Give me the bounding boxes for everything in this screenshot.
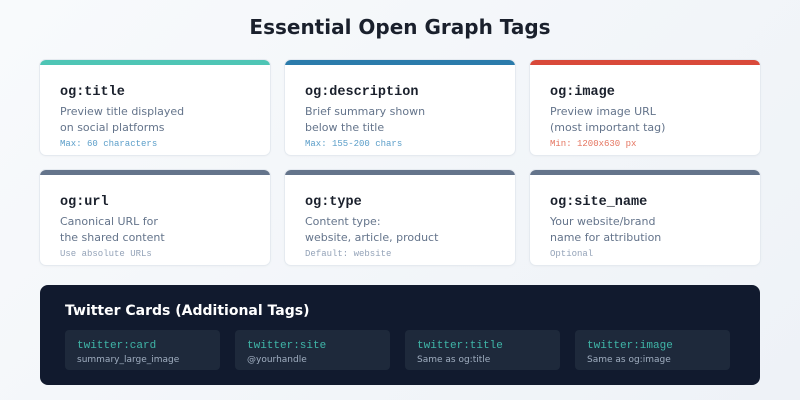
card: og:title: on social platforms — [60, 121, 165, 134]
chip: twitter:card — [65, 330, 220, 370]
panel: twitter cards — [40, 285, 760, 385]
card: og:type: Default: website — [305, 249, 391, 259]
chip: twitter:site — [235, 330, 390, 370]
card: og:site_name — [530, 170, 760, 265]
card: og:url: Use absolute URLs — [60, 249, 152, 259]
card: og:site_name: og:site_name — [550, 195, 647, 210]
card: og:description: og:description — [305, 85, 418, 100]
card: og:description: below the title — [305, 121, 384, 134]
card: og:image: (most important tag) — [550, 121, 665, 134]
chip: twitter:card: summary_large_image — [77, 355, 179, 365]
card: og:image: og:image — [550, 85, 615, 100]
card: og:description: Max: 155-200 chars — [305, 139, 402, 149]
card: og:image: Min: 1200x630 px — [550, 139, 636, 149]
card: og:site_name: Your website/brand — [550, 215, 656, 228]
card: og:title — [40, 60, 270, 155]
card: og:url: the shared content — [60, 231, 165, 244]
chip: twitter:title — [405, 330, 560, 370]
title: Essential Open Graph Tags — [249, 15, 551, 39]
card: og:type — [285, 170, 515, 265]
card: og:site_name: Optional — [550, 249, 593, 259]
chip: twitter:title: twitter:title — [417, 340, 503, 352]
card: og:url: Canonical URL for — [60, 215, 158, 228]
card: og:title: Preview title displayed — [60, 105, 184, 118]
chip: twitter:image: twitter:image — [587, 340, 673, 352]
card: og:title: Max: 60 characters — [60, 139, 157, 149]
card: og:type: Content type: — [305, 215, 381, 228]
card: og:url — [40, 170, 270, 265]
card: og:image — [530, 60, 760, 155]
chip: twitter:image — [575, 330, 730, 370]
chip: twitter:site: twitter:site — [247, 340, 326, 352]
card: og:type: og:type — [305, 195, 362, 210]
card: og:title: og:title — [60, 85, 125, 100]
card: og:type: website, article, product — [305, 231, 438, 244]
card: og:site_name: name for attribution — [550, 231, 661, 244]
card: og:image: Preview image URL — [550, 105, 656, 118]
chip: twitter:site: @yourhandle — [247, 355, 307, 365]
chip: twitter:card: twitter:card — [77, 340, 156, 352]
card: og:description: Brief summary shown — [305, 105, 425, 118]
chip: twitter:image: Same as og:image — [587, 355, 671, 365]
heading: Twitter Cards (Additional Tags) — [65, 303, 309, 319]
chip: twitter:title: Same as og:title — [417, 355, 490, 365]
card: og:description — [285, 60, 515, 155]
card: og:url: og:url — [60, 195, 109, 210]
